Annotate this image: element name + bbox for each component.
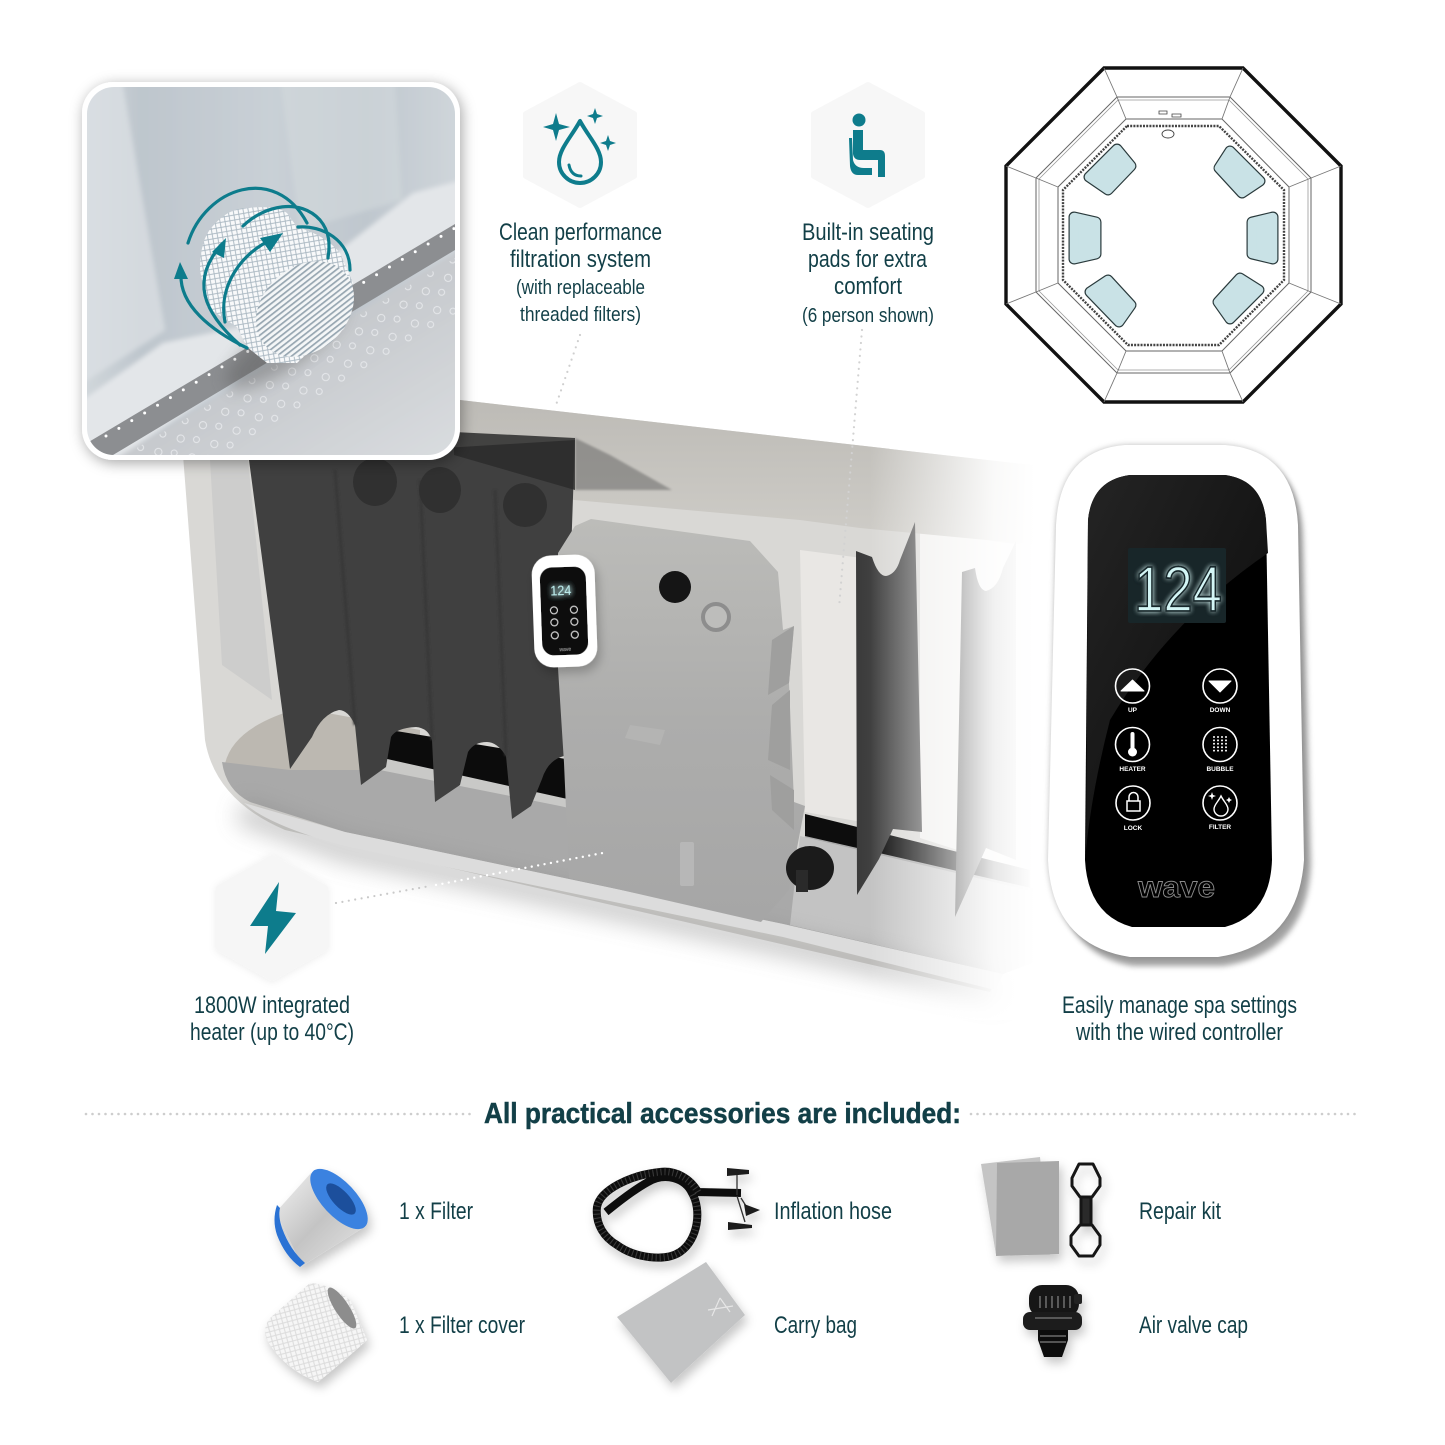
fittings — [1159, 111, 1181, 117]
nozzle lines — [737, 1175, 746, 1222]
pad SE — [1218, 278, 1259, 319]
text: seating — [802, 219, 934, 327]
blurred backdrop — [80, 80, 462, 462]
rail grey left — [378, 757, 572, 815]
floor beige — [224, 708, 420, 810]
accessory: carry bag — [617, 1262, 745, 1383]
back patch — [981, 1157, 1050, 1255]
button: lock — [1116, 786, 1150, 832]
heater panel blocks — [768, 626, 794, 830]
icon: heater hexagon — [219, 858, 325, 978]
band octagon inner line — [1039, 100, 1308, 370]
nozzle tips — [727, 1168, 760, 1230]
seated body — [849, 130, 885, 177]
text: seating: Built-in seating — [802, 219, 934, 246]
accessory: repair kit — [981, 1157, 1100, 1256]
label: 1 x Filter — [399, 1198, 473, 1225]
hose loop — [597, 1172, 741, 1258]
accessory: air valve cap — [1023, 1285, 1082, 1357]
curtain seams — [335, 470, 506, 756]
padlock — [1127, 792, 1140, 811]
bag body — [617, 1262, 745, 1383]
label: Inflation hose — [774, 1198, 892, 1225]
text: filtration: filtration system — [510, 246, 651, 273]
lower fabric — [138, 254, 455, 455]
panel: wired controller — [1048, 445, 1311, 966]
fade to white — [870, 380, 1035, 1020]
rings — [125, 258, 455, 455]
right curtain 1 — [856, 522, 922, 895]
filter cap — [256, 261, 354, 357]
outer octagon — [1006, 68, 1341, 402]
button: down — [1203, 669, 1237, 714]
display digits: 124 — [1134, 553, 1222, 625]
cover opening — [323, 1284, 361, 1332]
button: filter: FILTER — [1209, 824, 1231, 831]
drop shine — [569, 165, 581, 176]
air valve knob — [786, 846, 834, 892]
curtain body — [249, 440, 575, 819]
button: heater — [1116, 728, 1150, 773]
hexagon — [219, 858, 325, 978]
label: Carry bag — [774, 1312, 857, 1339]
photo — [80, 80, 462, 462]
leader line: heater grey — [336, 886, 430, 903]
floor grey — [222, 762, 1040, 974]
button: lock: LOCK — [1124, 825, 1143, 832]
display — [1128, 548, 1226, 623]
filter hole — [322, 1179, 360, 1219]
accessory: filter — [274, 1160, 377, 1267]
curtain hole 1 — [353, 458, 397, 506]
soft shadow under rim — [240, 812, 1003, 992]
heater body — [558, 519, 805, 922]
accessory: filter cover — [265, 1283, 367, 1382]
up glyph — [1121, 680, 1144, 691]
heater port — [703, 604, 729, 630]
top drain — [1162, 130, 1174, 138]
panel: filter close-up photo — [80, 80, 462, 462]
rim — [244, 803, 1003, 990]
text: controller: Easily manage spa settings — [1062, 992, 1297, 1019]
front patch — [996, 1161, 1059, 1256]
left dark curtains — [249, 432, 672, 819]
mini face — [539, 566, 589, 656]
tub wall — [183, 400, 1040, 992]
drop — [1214, 796, 1228, 816]
text: controller — [1062, 992, 1297, 1046]
text: filtration: threaded filters) — [520, 304, 641, 326]
text: filtration — [499, 219, 662, 326]
hexagon — [814, 85, 922, 205]
filter bottom rim — [274, 1205, 305, 1267]
pad W — [1074, 217, 1096, 259]
label: Repair kit — [1139, 1198, 1221, 1225]
strip dots — [106, 228, 455, 436]
text: seating: pads for extra — [808, 246, 928, 273]
top rim band — [460, 400, 1040, 545]
filter top ring — [301, 1160, 377, 1238]
mesh body — [265, 1283, 367, 1382]
diagram: spa top view — [1006, 68, 1341, 402]
heater unit — [558, 519, 805, 922]
text: heater: heater (up to 40°C) — [190, 1019, 354, 1046]
water drop — [559, 121, 601, 183]
left wall highlight — [210, 460, 272, 700]
heading: accessories: All practical accessories are included: — [484, 1098, 961, 1130]
filter shadow — [222, 324, 347, 396]
text: filtration: (with replaceable — [516, 277, 645, 299]
wave logo: wave — [1137, 871, 1215, 904]
valve thread — [1038, 1330, 1068, 1357]
label: Air valve cap — [1139, 1312, 1248, 1339]
translucent strip extension — [575, 438, 672, 490]
text: filtration: Clean performance — [499, 219, 662, 246]
valve head — [1029, 1285, 1079, 1317]
card frame — [82, 82, 460, 460]
filter body — [200, 207, 353, 363]
valve base — [786, 846, 834, 890]
curtain hole 3 — [503, 483, 547, 527]
corner lines — [1006, 68, 1341, 402]
button: down: DOWN — [1210, 707, 1231, 714]
wrench — [1071, 1164, 1100, 1256]
sparkles — [1208, 792, 1232, 803]
dark top strip — [454, 432, 575, 490]
inner octagon — [1058, 119, 1289, 351]
panel: spa cross-section — [183, 380, 1065, 1020]
valve highlights — [1035, 1296, 1072, 1342]
bag logo — [708, 1298, 733, 1316]
right curtain 2 — [955, 541, 1016, 917]
rear panel left of curtains — [800, 550, 862, 822]
leader line: seating — [839, 330, 862, 608]
controller ambient shadow — [1048, 445, 1304, 957]
sparkles — [543, 108, 616, 151]
mini shell — [531, 554, 598, 668]
valve collar — [1023, 1312, 1082, 1330]
curtain background — [87, 87, 455, 440]
rail black right — [805, 814, 1030, 893]
text: heater: 1800W integrated — [194, 992, 350, 1019]
curtain hole 2 — [419, 467, 461, 513]
valve stem — [796, 870, 808, 892]
button: filter — [1203, 786, 1237, 831]
heater label plate — [625, 725, 665, 745]
bead octagon — [1063, 126, 1284, 345]
controller face — [1085, 475, 1272, 927]
pad NW — [1089, 149, 1131, 190]
icon: seating hexagon — [814, 85, 922, 205]
rail black left — [378, 728, 572, 802]
bubble dots — [1214, 737, 1226, 754]
button: bubble: BUBBLE — [1206, 766, 1234, 773]
head — [852, 114, 866, 126]
pad NE — [1219, 151, 1260, 193]
leader line: heater white — [436, 852, 608, 885]
vertical fold 1 — [87, 87, 165, 376]
face gloss — [1086, 475, 1268, 850]
icon: filtration hexagon — [526, 85, 634, 205]
heater knob — [659, 571, 691, 603]
controller shadow — [1057, 456, 1311, 966]
text: seating: (6 person shown) — [802, 305, 934, 327]
floor right lighter — [790, 836, 1040, 974]
heater connector — [680, 842, 694, 886]
arrow heads — [174, 233, 283, 279]
vertical fold 2 — [314, 87, 398, 222]
thermometer — [1130, 734, 1134, 750]
rear panel between curtains — [920, 530, 1020, 870]
text: seating: comfort — [834, 273, 902, 300]
text: controller: with the wired controller — [1075, 1019, 1283, 1046]
light seam — [80, 180, 462, 460]
text: heater — [190, 992, 354, 1046]
button: up — [1116, 669, 1150, 714]
hexagon — [526, 85, 634, 205]
teal arrows — [181, 188, 350, 348]
mini digits: 124 — [550, 582, 572, 598]
pad SW — [1090, 280, 1131, 322]
leader line: filtration — [556, 335, 580, 405]
label: 1 x Filter cover — [399, 1312, 525, 1339]
button: bubble — [1203, 728, 1237, 773]
button: up: UP — [1128, 707, 1138, 714]
mini logo: wave — [559, 647, 572, 653]
button: heater: HEATER — [1119, 766, 1146, 773]
accessory: inflation hose — [597, 1168, 760, 1258]
hose corrugation — [597, 1172, 698, 1258]
filter body — [276, 1173, 366, 1266]
band octagon — [1036, 97, 1311, 373]
pad E — [1252, 217, 1273, 259]
valve side tab — [1074, 1294, 1082, 1304]
mini buttons — [550, 606, 578, 639]
grey strip — [87, 224, 455, 455]
controller shell — [1048, 445, 1304, 957]
lightning bolt — [250, 882, 296, 954]
fade block behind controller — [1035, 380, 1065, 1020]
down glyph — [1209, 681, 1231, 692]
mini controller — [531, 554, 598, 668]
